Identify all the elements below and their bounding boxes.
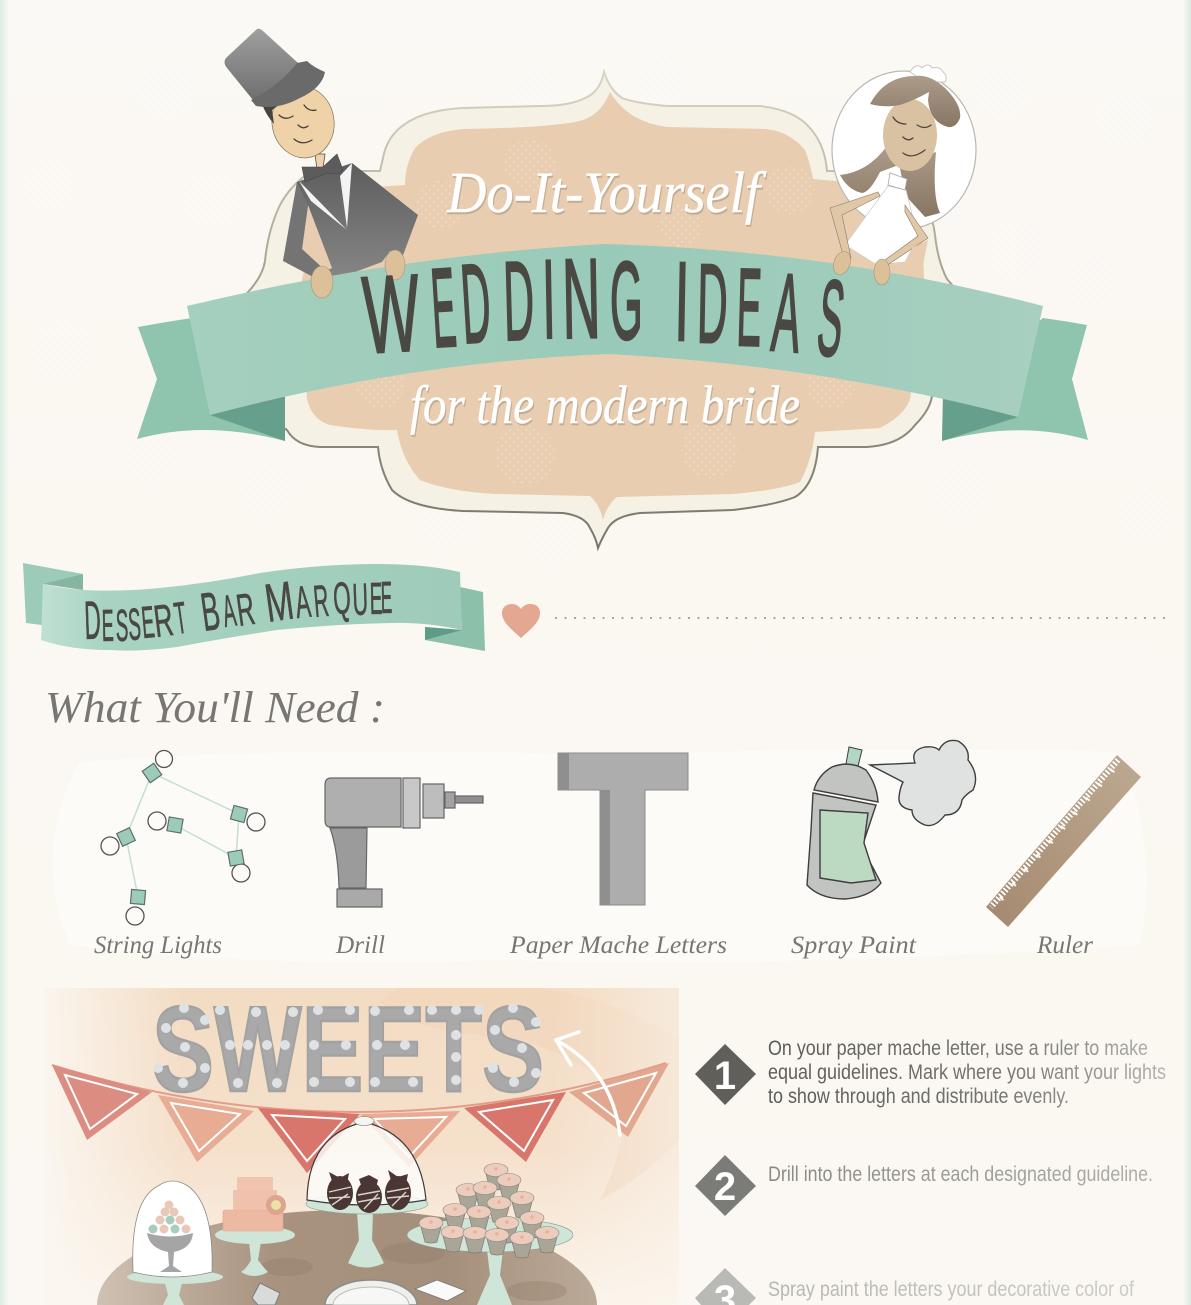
heading: what you'll need: What You'll Need :: [45, 683, 385, 732]
label: paper mache letters: Paper Mache Letters: [509, 932, 727, 959]
step 1 badge: [695, 1044, 756, 1105]
step 2: [695, 1155, 1153, 1216]
banner lettering: T: [172, 594, 190, 644]
title line 1: Do-It-Yourself: [446, 160, 766, 225]
groom bow tie: [302, 154, 343, 182]
banner lettering: R: [151, 595, 176, 647]
bride arms: [830, 192, 928, 275]
bride veil: [832, 71, 976, 229]
groom hair: [262, 92, 300, 124]
banner lettering: E: [101, 601, 114, 652]
icon: string lights: [101, 750, 265, 925]
groom top hat: [224, 29, 325, 107]
banner lettering: Q: [332, 573, 352, 624]
groom and bride hands on ribbon: [311, 249, 890, 298]
bride hair back: [840, 146, 940, 217]
icon: heart: [502, 604, 540, 638]
title line 2: Wedding Ideas: D: [502, 237, 536, 364]
banner lettering: E: [140, 598, 156, 648]
banner lettering: M: [261, 569, 297, 634]
label: spray paint: Spray Paint: [791, 932, 917, 959]
cake on stand: [215, 1177, 295, 1276]
ribbon tail left: [137, 318, 285, 441]
character: groom: [224, 29, 418, 285]
groom head: [266, 81, 340, 163]
left dome with truffle bowl: [127, 1181, 223, 1305]
character: bride: [830, 65, 976, 275]
banner lettering: U: [352, 575, 369, 625]
supplies backdrop: [52, 749, 1147, 962]
title line 2: Wedding Ideas: A: [768, 250, 806, 376]
banner lettering: B: [197, 581, 224, 644]
peach plaque: [300, 92, 925, 520]
round table: [97, 1210, 597, 1305]
groom jacket: [283, 163, 418, 285]
bride face features: [893, 117, 931, 156]
banner lettering: E: [369, 575, 383, 624]
title line 2: Wedding Ideas: I: [541, 237, 557, 363]
banner lettering: S: [127, 600, 142, 650]
banner lettering: D: [83, 590, 102, 651]
section banner: Dessert Bar Marquee: [23, 563, 485, 652]
title line 2: Wedding Ideas: D: [458, 240, 494, 367]
title line 2: Wedding Ideas: D: [696, 240, 729, 366]
arrow: curved white pointer: [556, 1032, 620, 1135]
large dome with strawberries: [306, 1116, 428, 1268]
icon: paper mache letter: [558, 753, 688, 905]
title line 2: Wedding Ideas: E: [428, 245, 459, 371]
dotted divider: [555, 617, 1168, 619]
bride tiara: [910, 65, 946, 82]
cupcake tower: [407, 1164, 573, 1305]
marquee word SWEETS: SWEETS: [152, 981, 544, 1117]
groom face: [279, 105, 316, 143]
title line 2: Wedding Ideas: S: [812, 258, 849, 381]
bride hair top: [870, 76, 960, 127]
banner lettering: R: [312, 576, 331, 627]
step 2 badge: 2: [714, 1165, 736, 1209]
banner lettering: E: [380, 573, 393, 624]
step 3: [695, 1268, 1134, 1305]
title line 2: Wedding Ideas: G: [610, 239, 643, 363]
title line 2: Wedding Ideas: N: [561, 235, 601, 362]
step 1 badge: 1: [714, 1054, 736, 1098]
title line 2: Wedding Ideas: I: [674, 239, 690, 365]
step 1: [695, 1037, 1166, 1108]
bride face: [883, 99, 937, 171]
plate and napkins: [252, 1280, 466, 1305]
decorative plaque frame: [240, 72, 990, 548]
title line 2: Wedding Ideas: E: [735, 247, 763, 370]
title line 2: Wedding Ideas: [360, 235, 849, 381]
icon: drill: [325, 778, 483, 907]
groom neck: [315, 154, 325, 170]
bunting flags: [52, 1063, 669, 1173]
banner lettering: [83, 569, 393, 652]
icon: ruler: [986, 755, 1141, 927]
main ribbon: [187, 244, 1043, 417]
bride collar: [888, 173, 907, 190]
banner lettering: S: [115, 602, 129, 651]
step 2 badge: [695, 1155, 756, 1216]
label: string lights: String Lights: [94, 932, 222, 959]
bride dress: [845, 186, 918, 265]
title line 2: Wedding Ideas: W: [360, 251, 423, 377]
step 1 text: to show through and distribute evenly.: [768, 1085, 1069, 1108]
illustration panel: sweets dessert bar: [43, 981, 679, 1305]
step 3 badge: [695, 1268, 756, 1305]
banner lettering: R: [233, 583, 258, 636]
step 3 text: Spray paint the letters your decorative color of: [768, 1278, 1134, 1301]
banner lettering: A: [293, 576, 313, 628]
title line 3: for the modern bride: [410, 375, 800, 435]
icon: spray paint: [807, 740, 976, 899]
step 1 text: [768, 1037, 1166, 1108]
banner lettering: A: [220, 587, 239, 637]
label: drill: Drill: [335, 932, 385, 959]
ribbon tail right: [942, 318, 1088, 441]
label: ruler: Ruler: [1036, 932, 1093, 959]
